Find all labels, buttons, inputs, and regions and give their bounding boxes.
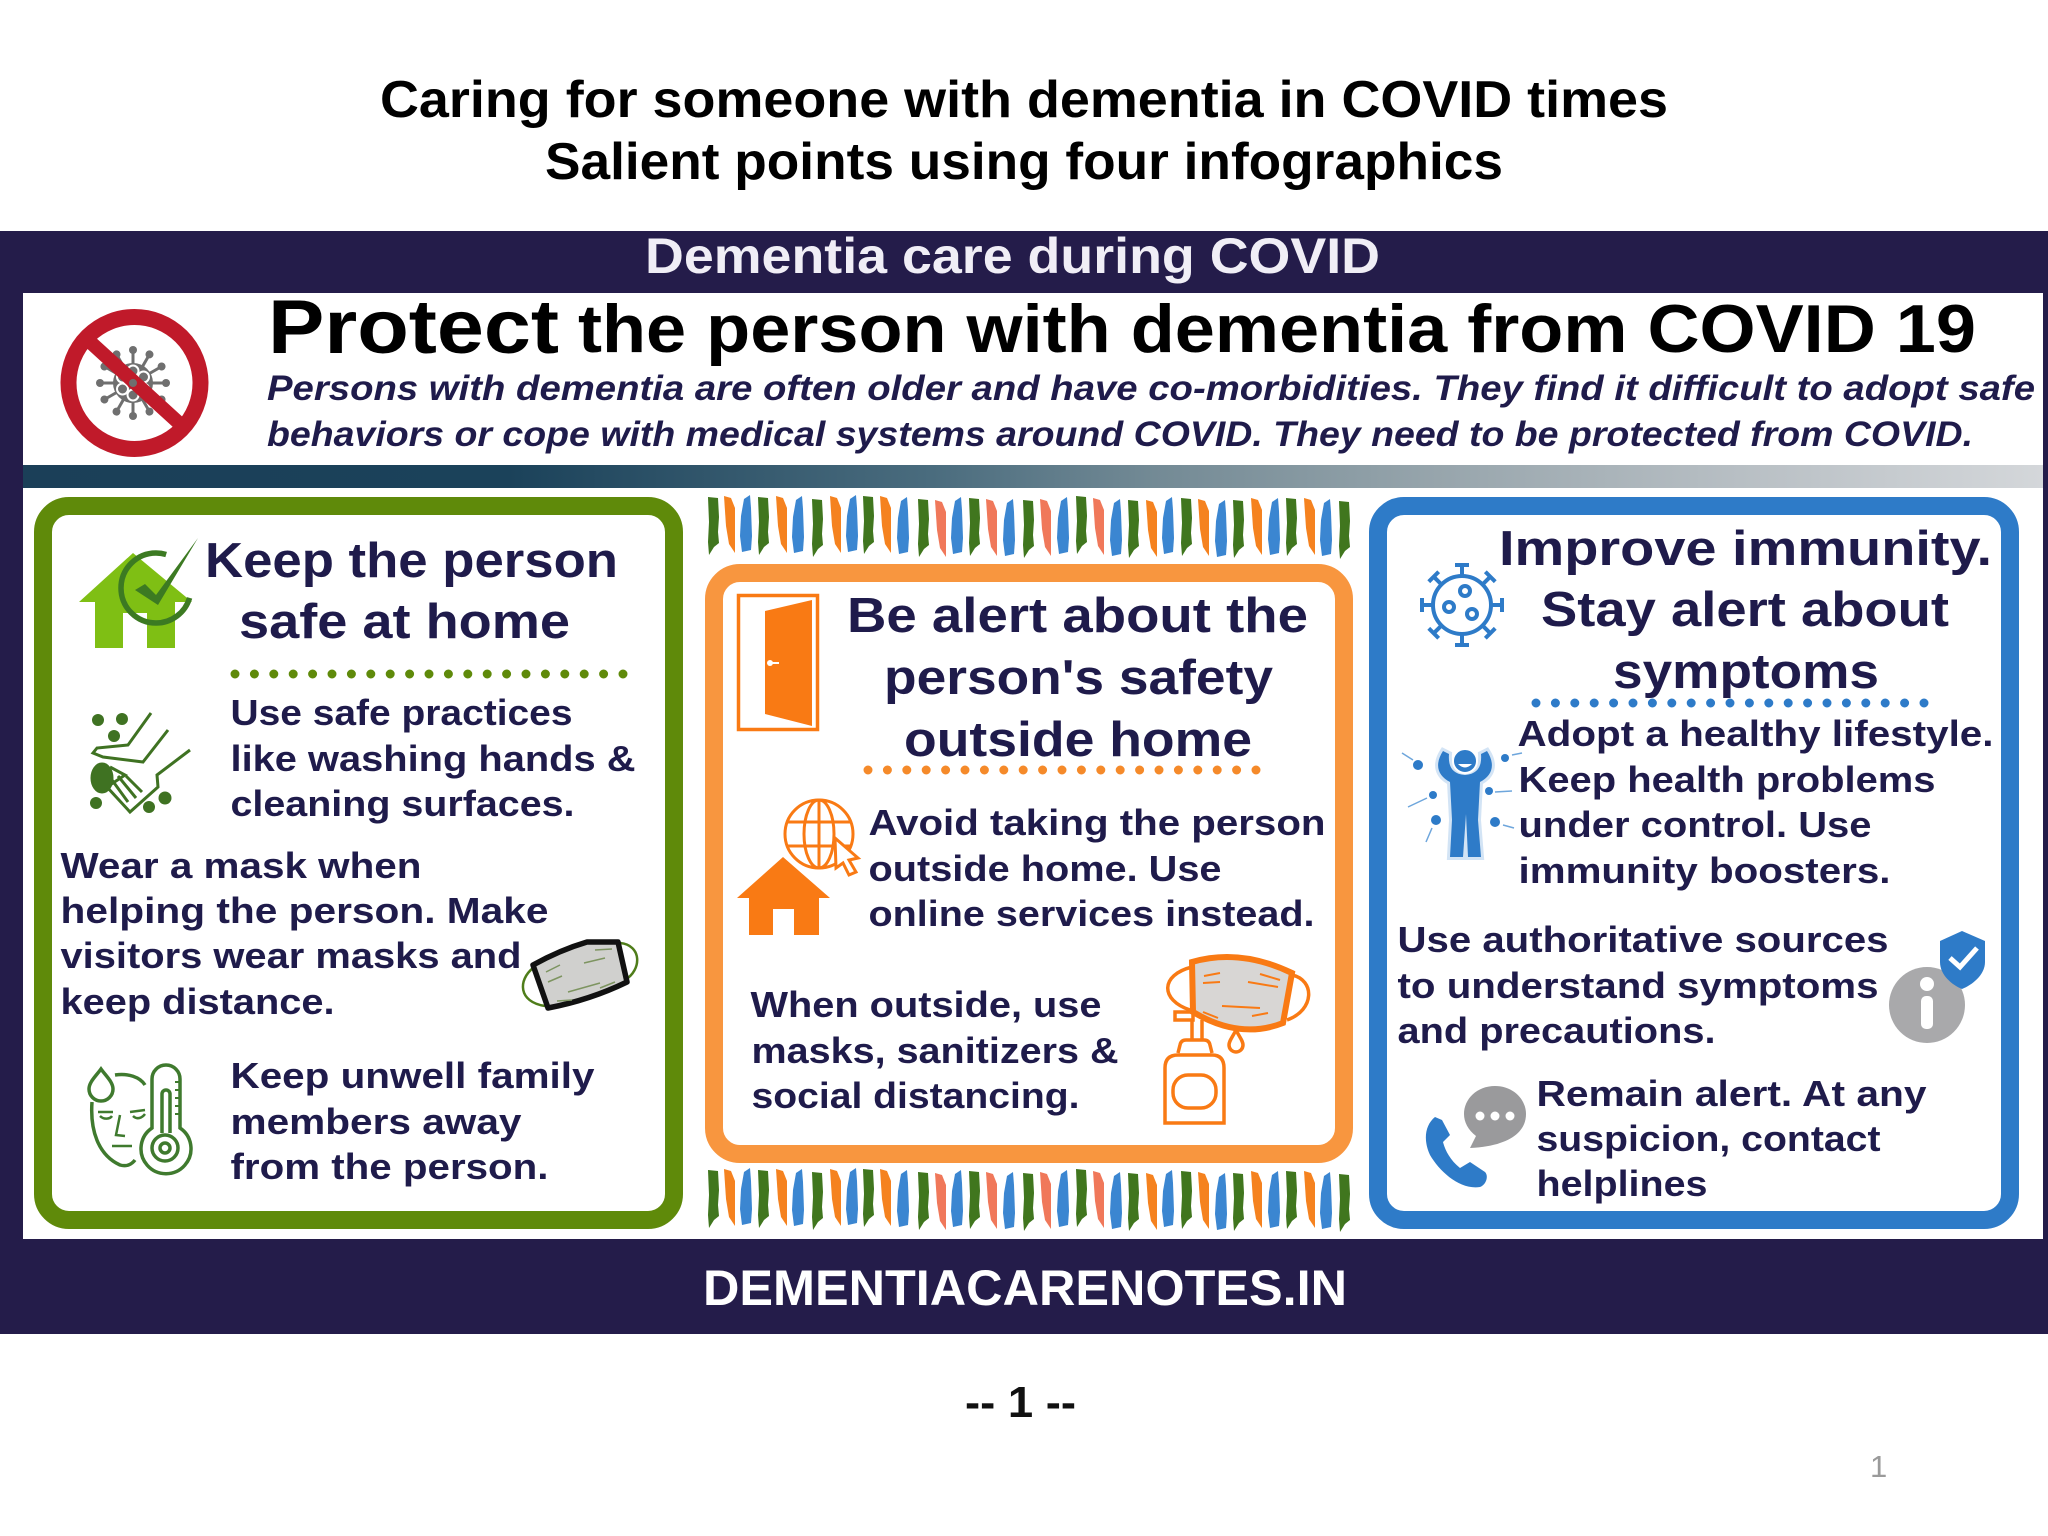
text: when outside [750,984,1118,1116]
banner heading: Dementia care during COVID [645,228,1380,284]
text: keep unwell family away: members away [230,1101,522,1142]
icon: mask and sanitizer [1165,957,1309,1123]
icon: info and shield [1889,931,1985,1043]
text: when outside: social distancing. [752,1075,1080,1116]
gradient divider bar [23,465,2043,488]
text: healthy lifestyle: immunity boosters. [1518,850,1890,891]
icon: virus [1422,565,1502,645]
icon: face mask [523,942,637,1008]
heading: Be alert about the [847,589,1308,643]
heading: Stay alert about [1541,583,1949,637]
intro text: Persons with dementia are often older and have co-morbidities. They find it difficult to adopt safe [267,369,2035,408]
text: safe practices: like washing hands & [230,738,636,779]
icon: phone and chat [1426,1086,1526,1187]
text: wear a mask: Wear a mask when [60,845,422,886]
text: authoritative sources [1398,919,1888,1051]
heading: safe at home [239,595,570,649]
title [380,71,1668,191]
slide number: 1 [1870,1449,1887,1484]
panel: be alert outside home [714,573,1344,1154]
text: wear a mask: keep distance. [60,981,334,1022]
text: healthy lifestyle: under control. Use [1518,804,1872,845]
heading [205,534,618,649]
text: healthy lifestyle: Keep health problems [1518,759,1936,800]
text: wear a mask [60,845,548,1022]
white content area [23,293,2043,1239]
title: Salient points using four infographics [545,133,1503,191]
panel: keep safe at home [43,506,674,1220]
decorative strokes top [708,495,1350,559]
text: remain alert: suspicion, contact [1536,1118,1881,1159]
icon: hand washing [90,713,190,813]
intro text [267,369,2035,454]
heading: symptoms [1613,645,1879,699]
icon: strong person [1402,749,1522,857]
text: remain alert [1536,1073,1926,1204]
text: healthy lifestyle: Adopt a healthy lifestyle. [1518,713,1994,754]
intro text: behaviors or cope with medical systems around COVID. They need to be protected from COVID. [267,415,1973,454]
page marker: -- 1 -- [965,1378,1076,1427]
text: authoritative sources: to understand symptoms [1398,965,1878,1006]
main heading: the person with dementia from COVID 19 [578,291,1976,367]
heading: Improve immunity. [1499,522,1992,576]
heading: person's safety [884,651,1273,705]
panel: improve immunity [1378,506,2010,1220]
text: when outside: When outside, use [750,984,1102,1025]
text: healthy lifestyle [1518,713,1994,891]
text: keep unwell family away [230,1055,594,1187]
heading: Keep the person [205,534,618,588]
text: authoritative sources: Use authoritative sources [1398,919,1888,960]
heading: outside home [904,713,1252,767]
heading [847,589,1308,767]
text: safe practices: Use safe practices [230,692,572,733]
main heading: Protect [268,285,559,370]
text: when outside: masks, sanitizers & [752,1030,1118,1071]
heading [1499,522,1992,699]
icon: house with check [79,538,198,648]
text: wear a mask: helping the person. Make [60,890,548,931]
text: avoid outside: online services instead. [868,893,1314,934]
text: wear a mask: visitors wear masks and [60,935,522,976]
text: remain alert: Remain alert. At any [1536,1073,1926,1114]
text: remain alert: helplines [1536,1163,1708,1204]
text: safe practices: cleaning surfaces. [230,783,574,824]
text: keep unwell family away: from the person. [230,1146,548,1187]
text: avoid outside [868,802,1326,934]
icon: door [738,596,818,730]
main heading [268,285,1976,370]
icon: fever face and thermometer [89,1065,191,1174]
navy frame [0,231,2048,1334]
footer website: DEMENTIACARENOTES.IN [703,1260,1347,1316]
title: Caring for someone with dementia in COVID times [380,71,1668,129]
text: safe practices [230,692,636,824]
text: keep unwell family away: Keep unwell family [230,1055,594,1096]
icon: globe and house [737,800,858,935]
icon: no virus sign [68,317,200,449]
text: avoid outside: outside home. Use [868,848,1222,889]
text: authoritative sources: and precautions. [1398,1010,1716,1051]
text: avoid outside: Avoid taking the person [868,802,1326,843]
